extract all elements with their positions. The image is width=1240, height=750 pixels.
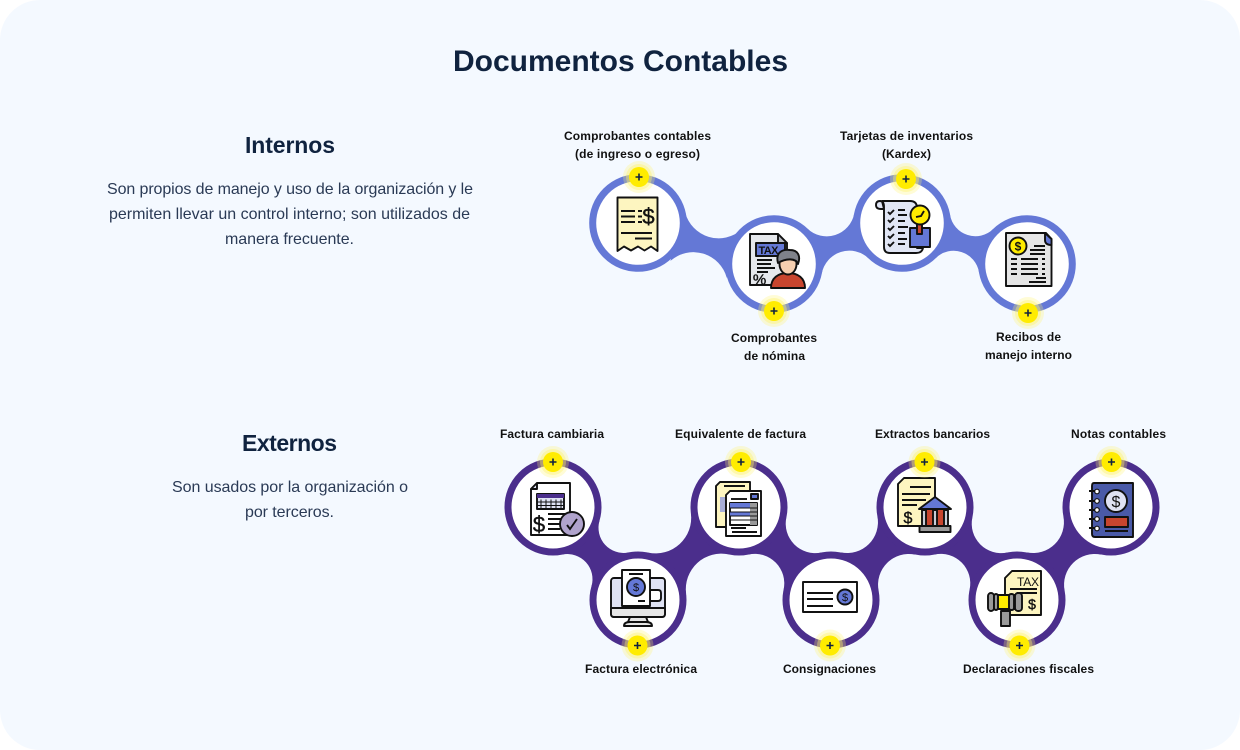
label: tarjetas de inventarios — [840, 129, 973, 161]
label: recibos de manejo interno: manejo interno — [985, 348, 1072, 362]
text block: internos description: permiten llevar un control interno; son utilizados de — [109, 206, 470, 223]
icon: declaraciones fiscales — [988, 571, 1041, 626]
marker: plus 4 — [1012, 297, 1044, 329]
marker: plus 6 — [1004, 630, 1036, 662]
text block: internos description — [107, 181, 473, 248]
label: comprobantes contables: Comprobantes contables — [564, 129, 711, 143]
label: comprobantes de nomina: Comprobantes — [731, 331, 817, 345]
marker: plus 7 — [1096, 446, 1128, 478]
label: extractos bancarios: Extractos bancarios — [875, 427, 990, 441]
label: factura electronica: Factura electrónica — [585, 662, 697, 676]
rings: internos — [593, 178, 1072, 309]
icon: tax payroll: TAX — [758, 245, 779, 257]
label: tarjetas de inventarios: Tarjetas de inventarios — [840, 129, 973, 143]
label: comprobantes contables — [564, 129, 711, 161]
marker: plus 3 — [725, 446, 757, 478]
label: consignaciones: Consignaciones — [783, 662, 876, 676]
label: declaraciones fiscales: Declaraciones fiscales — [963, 662, 1094, 676]
icon: inventory kardex — [876, 201, 930, 253]
icon: factura cambiaria: $ — [533, 512, 545, 537]
icon: consignaciones: $ — [842, 592, 848, 604]
icon: internal receipt — [1006, 233, 1052, 286]
marker: plus 3 — [890, 163, 922, 195]
text block: externos description — [172, 479, 408, 521]
icon: consignaciones — [803, 582, 857, 612]
title: Documentos Contables — [453, 45, 788, 78]
label: equivalente de factura: Equivalente de factura — [675, 427, 806, 441]
label: comprobantes contables: (de ingreso o egreso) — [575, 147, 700, 161]
marker: plus 2 — [758, 295, 790, 327]
icon: receipt: $ — [642, 204, 655, 229]
label: tarjetas de inventarios: (Kardex) — [882, 147, 931, 161]
icon: internal receipt: $ — [1015, 240, 1022, 254]
chart: externos chain — [500, 427, 1166, 676]
icon: factura electronica: $ — [633, 582, 639, 594]
icon: extractos bancarios — [898, 478, 951, 532]
marker: plus 4 — [814, 630, 846, 662]
panel: internos text — [107, 132, 473, 248]
connectors: externos — [562, 513, 1101, 594]
heading: internos: Internos — [245, 132, 335, 158]
icon: extractos bancarios: $ — [904, 510, 913, 527]
icon: notas contables: $ — [1112, 494, 1121, 511]
text block: externos description: Son usados por la organización o — [172, 479, 408, 496]
label: factura cambiaria: Factura cambiaria — [500, 427, 604, 441]
chart: internos chain — [564, 129, 1072, 363]
panel: externos text — [172, 430, 408, 521]
icon: equivalente de factura — [716, 482, 761, 536]
connectors: internos — [670, 213, 993, 278]
icon: declaraciones fiscales: $ — [1028, 596, 1036, 612]
marker: plus 1 — [537, 446, 569, 478]
text block: externos description: por terceros. — [245, 504, 334, 521]
heading: externos: Externos — [242, 430, 337, 456]
label: comprobantes de nomina: de nómina — [744, 349, 805, 363]
icon: tax payroll: % — [753, 272, 766, 288]
text block: internos description: manera frecuente. — [225, 231, 354, 248]
label: recibos de manejo interno — [985, 330, 1072, 362]
marker: plus 5 — [908, 446, 940, 478]
rings: externos — [508, 462, 1156, 645]
icon: factura cambiaria — [531, 483, 584, 537]
label: notas contables: Notas contables — [1071, 427, 1166, 441]
marker: plus 1 — [623, 161, 655, 193]
icon: tax payroll — [750, 234, 805, 288]
icon: declaraciones fiscales: TAX — [1017, 575, 1039, 589]
label: recibos de manejo interno: Recibos de — [996, 330, 1061, 344]
label: comprobantes de nomina — [731, 331, 817, 363]
icon: receipt — [618, 198, 658, 251]
text block: internos description: Son propios de manejo y uso de la organización y le — [107, 181, 473, 198]
icon: factura electronica — [611, 570, 665, 626]
icon: notas contables — [1089, 483, 1133, 537]
marker: plus 2 — [622, 630, 654, 662]
